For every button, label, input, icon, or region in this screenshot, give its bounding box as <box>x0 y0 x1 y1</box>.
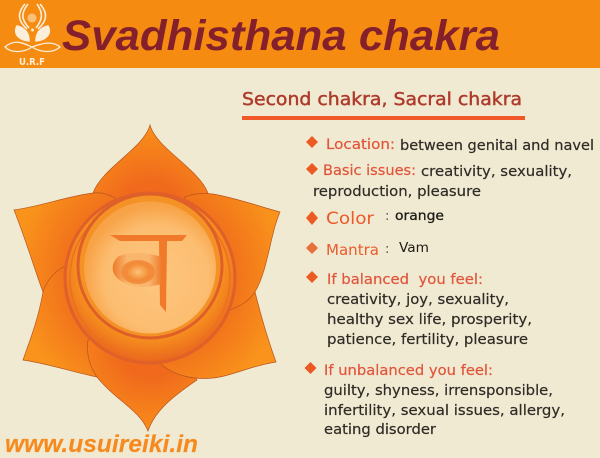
info: mantra: : <box>385 242 389 257</box>
inner ring <box>78 194 222 338</box>
bullet <box>306 242 318 254</box>
bija mantra glyph <box>110 235 187 312</box>
info: if balanced: healthy sex life, prosperity, <box>327 312 532 328</box>
info: mantra <box>306 240 429 259</box>
info: if unbalanced: infertility, sexual issues, allergy, <box>324 403 565 419</box>
outer ring <box>65 193 235 363</box>
info: if unbalanced <box>304 362 565 438</box>
info: location: between genital and navel <box>400 138 594 154</box>
info: color: Color <box>326 209 374 229</box>
header band <box>0 0 600 68</box>
bullet <box>306 136 318 148</box>
info: location <box>306 136 594 154</box>
subtitle: Second chakra, Sacral chakra <box>242 89 522 110</box>
petal: lower right <box>150 280 276 378</box>
petal: top <box>93 125 208 280</box>
info: basic issues <box>306 163 572 200</box>
info: color: orange <box>395 209 444 224</box>
info: color: : <box>385 209 389 224</box>
info: if balanced <box>306 271 532 348</box>
bullet <box>306 271 318 283</box>
info: color <box>306 209 444 229</box>
bullet <box>306 211 318 225</box>
petal: bottom <box>87 280 197 431</box>
info: mantra: Mantra <box>326 241 379 259</box>
info: if balanced: creativity, joy, sexuality, <box>327 292 509 308</box>
chakra symbol <box>14 125 280 431</box>
info: if balanced: If balanced you feel: <box>327 272 483 288</box>
logo: U.R.F meditating figure <box>5 4 60 68</box>
info: if unbalanced: If unbalanced you feel: <box>324 363 493 379</box>
info: mantra: Vam <box>399 240 429 256</box>
subtitle underline <box>242 116 525 120</box>
info: basic issues: reproduction, pleasure <box>313 184 481 200</box>
petal: upper left <box>14 193 150 292</box>
info: location: Location: <box>326 137 395 153</box>
title: Svadhisthana chakra <box>62 12 500 60</box>
petal: lower left <box>23 267 150 377</box>
logo text: U.R.F <box>19 57 45 68</box>
bullet <box>304 362 316 374</box>
info: basic issues: creativity, sexuality, <box>421 164 572 180</box>
info: if unbalanced: guilty, shyness, irrensponsible, <box>324 383 553 399</box>
bullet <box>306 163 318 175</box>
info: basic issues: Basic issues: <box>323 163 416 179</box>
info: if balanced: patience, fertility, pleasure <box>327 332 528 348</box>
info: if unbalanced: eating disorder <box>324 422 436 438</box>
petal: upper right <box>150 193 280 310</box>
central disk <box>84 202 216 334</box>
footer url: www.usuireiki.in <box>5 431 198 458</box>
